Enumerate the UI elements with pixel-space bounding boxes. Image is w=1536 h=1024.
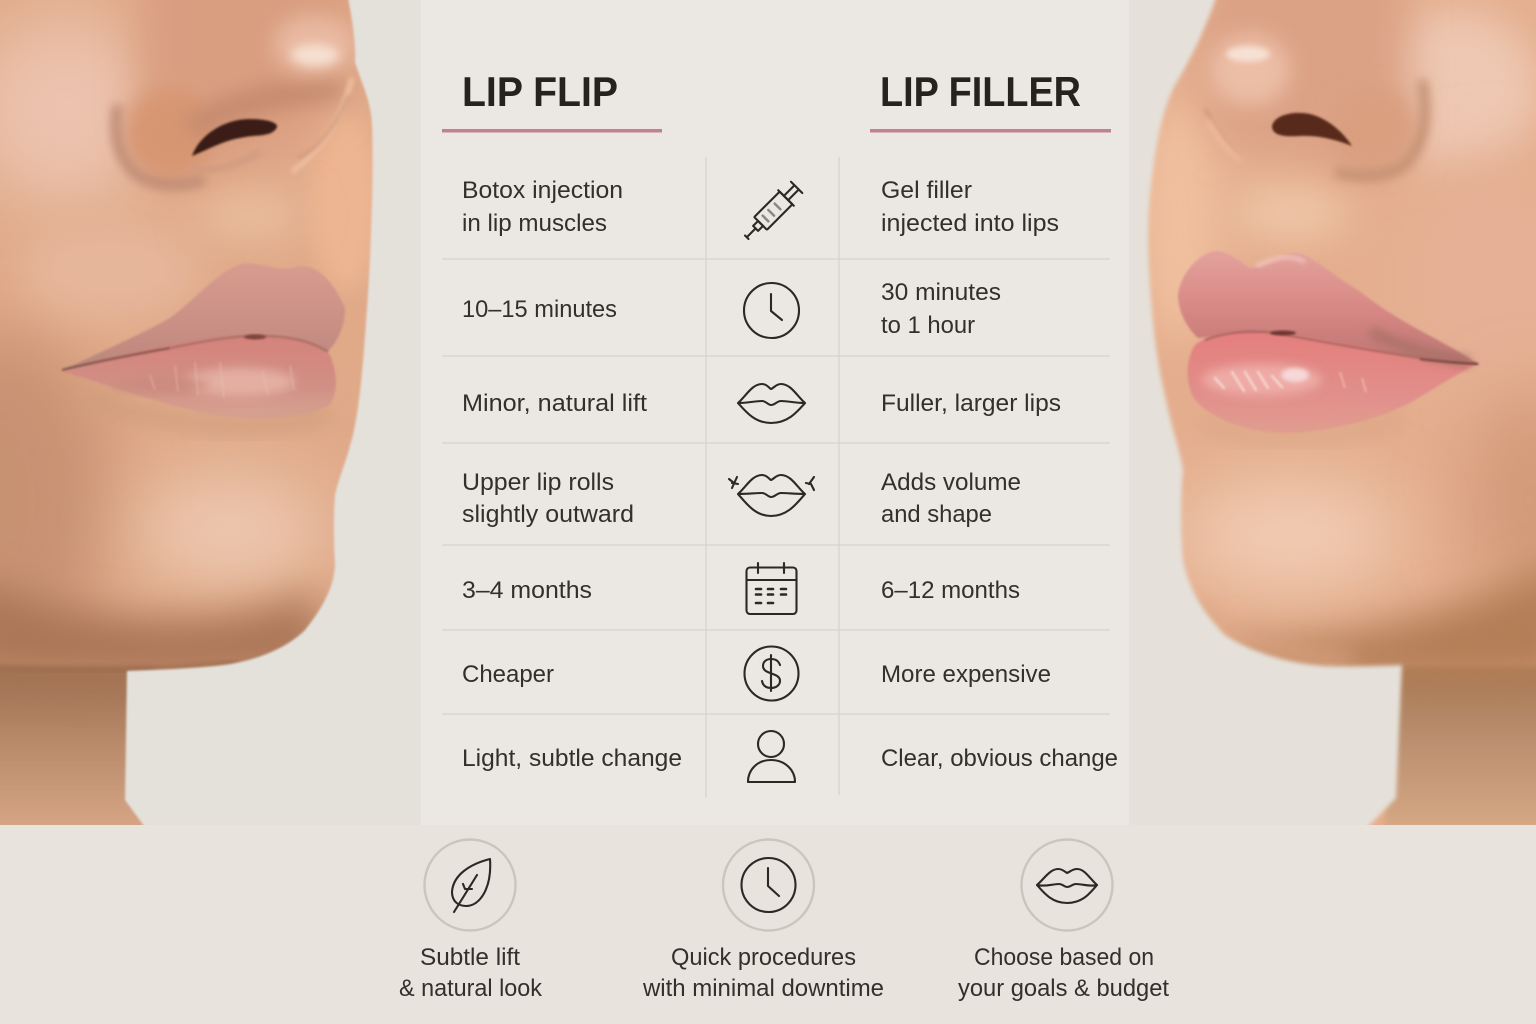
lip filler time text: 30 minutes (881, 279, 1001, 306)
takeaway: choose by goals (958, 840, 1169, 1002)
icon: lips in circle (1022, 840, 1112, 930)
lip filler change text: Clear, obvious change (881, 745, 1118, 772)
icon: clock in circle (723, 840, 814, 930)
row 2: procedure time (462, 279, 1001, 339)
lip flip size text: Minor, natural lift (462, 390, 647, 417)
icon: lips with lift marks (729, 475, 814, 516)
takeaway text: Subtle lift (420, 944, 520, 971)
row 7: visible change (462, 731, 1118, 782)
heading: Lip Flip: LIP FLIP (462, 68, 618, 115)
takeaway text: your goals & budget (958, 975, 1169, 1002)
photo: lip flip result, left face (0, 0, 374, 825)
lip filler time text (881, 279, 1001, 339)
takeaway text: Quick procedures (671, 944, 856, 971)
row 6: cost (462, 646, 1051, 700)
lip filler cost text: More expensive (881, 661, 1051, 688)
row 3: size result (462, 384, 1061, 423)
takeaway: subtle lift (399, 840, 543, 1002)
heading: Lip Filler (870, 68, 1111, 132)
row 4: effect on lip (462, 469, 1021, 528)
lip filler effect text: and shape (881, 501, 992, 528)
icon: clock (744, 283, 799, 338)
lips (1178, 251, 1478, 364)
lip flip effect text (462, 469, 634, 528)
row 5: duration (462, 563, 1020, 614)
lip filler method text: injected into lips (881, 210, 1059, 237)
takeaway text: & natural look (399, 975, 543, 1002)
icon: person (748, 731, 795, 782)
lip filler time text: to 1 hour (881, 312, 975, 339)
lip filler effect text (881, 469, 1021, 528)
takeaway: quick procedures (642, 840, 884, 1002)
lip flip effect text: Upper lip rolls (462, 469, 614, 496)
lips (63, 263, 345, 370)
icon: syringe (739, 180, 804, 245)
lip flip method text (462, 177, 623, 237)
takeaway text (642, 944, 884, 1002)
photo: lip filler result, right face (1125, 0, 1536, 836)
takeaway text: with minimal downtime (642, 975, 884, 1002)
center comparison panel (421, 0, 1129, 825)
icon: dollar coin (744, 646, 798, 700)
lip filler effect text: Adds volume (881, 469, 1021, 496)
lip flip cost text: Cheaper (462, 661, 554, 688)
icon: leaf in circle (424, 840, 516, 930)
heading: Lip Filler: LIP FILLER (880, 68, 1081, 115)
bottom strip background (0, 825, 1536, 1024)
lip flip effect text: slightly outward (462, 501, 634, 528)
takeaway text (399, 944, 543, 1002)
nose (140, 0, 357, 176)
lip filler size text: Fuller, larger lips (881, 390, 1061, 417)
lip flip time text: 10–15 minutes (462, 296, 617, 323)
heading: Lip Flip (442, 68, 662, 132)
lip filler duration text: 6–12 months (881, 577, 1020, 604)
lip flip duration text: 3–4 months (462, 577, 592, 604)
takeaway text: Choose based on (974, 944, 1154, 971)
lip filler method text: Gel filler (881, 177, 972, 204)
lip flip change text: Light, subtle change (462, 745, 682, 772)
takeaway text (958, 944, 1169, 1002)
nose (1202, 0, 1411, 175)
lip filler method text (881, 177, 1059, 237)
row 1: method (462, 177, 1059, 245)
icon: lips (738, 384, 805, 423)
lip flip method text: Botox injection (462, 177, 623, 204)
icon: calendar (746, 563, 796, 614)
lip flip method text: in lip muscles (462, 210, 607, 237)
